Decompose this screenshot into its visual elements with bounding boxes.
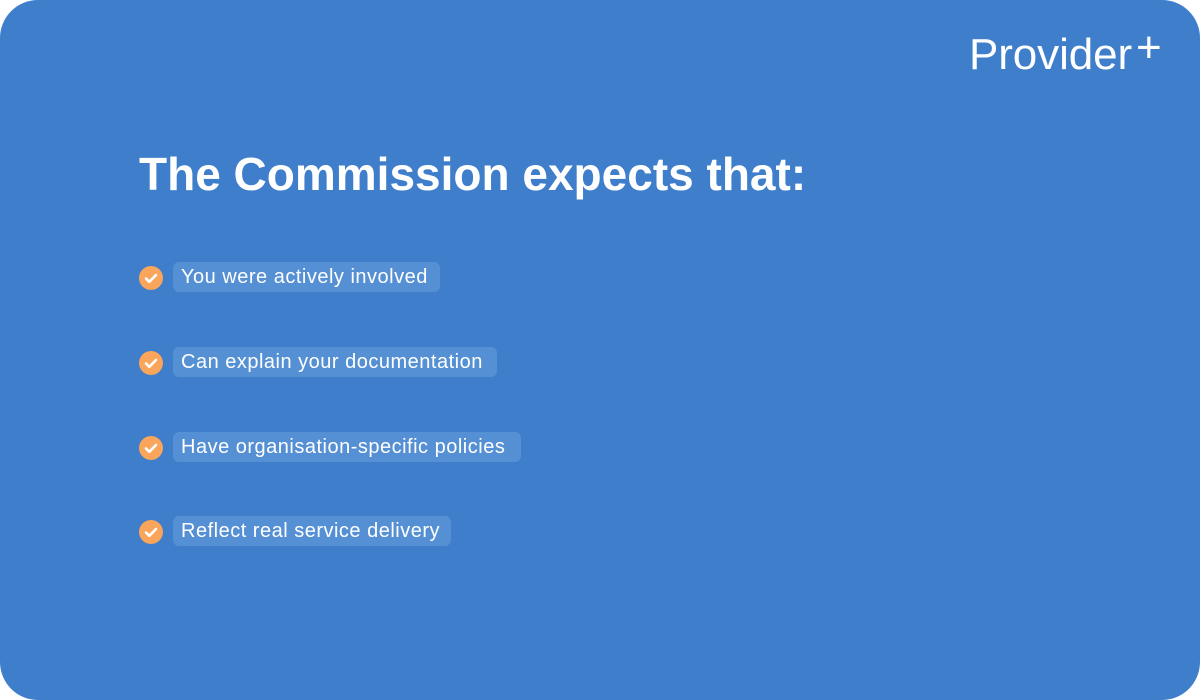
- pill text: Reflect real service delivery: [181, 520, 440, 542]
- item 3: [139, 432, 521, 462]
- item 1: [139, 262, 440, 292]
- icon: check: [139, 520, 163, 544]
- item 2: [139, 347, 497, 377]
- pill text: [173, 432, 521, 462]
- logo: Provider: [969, 30, 1132, 79]
- pill text: You were actively involved: [181, 266, 428, 288]
- pill text: Have organisation-specific policies: [181, 436, 505, 458]
- pill text: [173, 347, 497, 377]
- pill text: Can explain your documentation: [181, 351, 483, 373]
- pill text: [173, 262, 440, 292]
- item 4: [139, 516, 451, 546]
- logo plus: +: [1136, 23, 1162, 72]
- pill text: [173, 516, 451, 546]
- icon: check: [139, 436, 163, 460]
- title: The Commission expects that:: [139, 148, 806, 200]
- icon: check: [139, 351, 163, 375]
- icon: check: [139, 266, 163, 290]
